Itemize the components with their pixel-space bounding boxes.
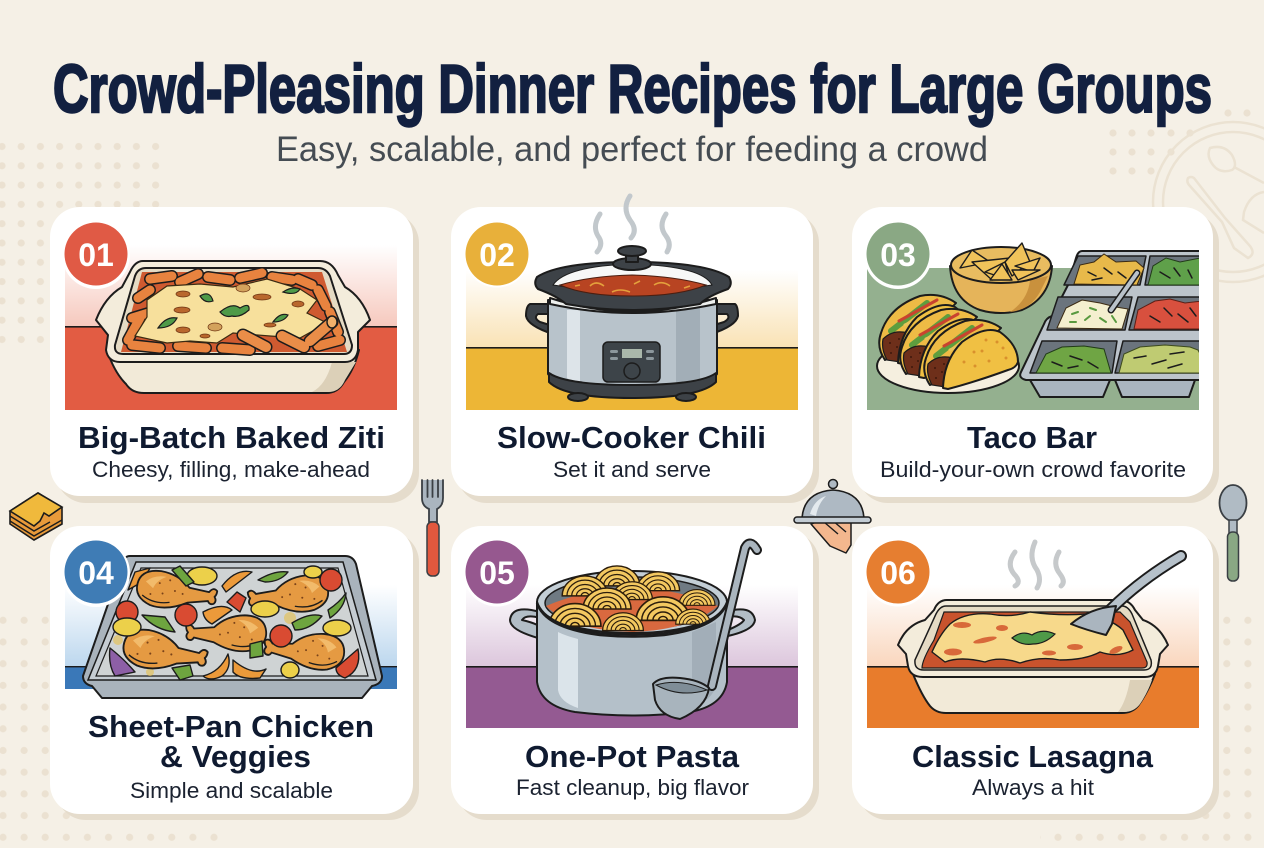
badge 04: 04 [78,555,114,591]
badge 02: 02 [479,237,515,273]
illustration: baked ziti dish [96,261,370,393]
badge 02 [464,220,530,288]
subtitle: Easy, scalable, and perfect for feeding a crowd [276,130,988,169]
badge 05 [464,540,530,606]
illustration: slow cooker [526,196,738,401]
icon: serving spoon [1071,556,1181,635]
card description: Build-your-own crowd favorite [880,457,1186,482]
card description: Cheesy, filling, make-ahead [92,457,370,482]
icon: serving cloche with hand [794,480,871,553]
decorative plate outline with cutlery [1153,122,1264,282]
icon: chip bowl [950,243,1052,313]
foreground ziti tubes [243,316,337,347]
badge 03: 03 [880,237,916,273]
illustration: sheet pan [83,556,382,698]
badge 04 [62,539,130,607]
icon: lasagna stack [10,493,62,540]
badge 01: 01 [78,237,114,273]
card heading second line: & Veggies [160,739,311,774]
panel: 06 classic lasagna [852,526,1219,820]
illustration: taco bar [877,243,1210,397]
card description: Simple and scalable [130,778,333,803]
panel: 01 baked ziti [50,207,419,503]
icon: topping tray [1020,251,1210,397]
badge 06: 06 [880,555,916,591]
card heading: One-Pot Pasta [525,739,740,774]
card description: Fast cleanup, big flavor [516,775,750,800]
card description: Always a hit [972,775,1095,800]
icon: steam [595,196,669,252]
panel: 05 one-pot pasta [451,526,819,820]
icon: steam [1010,542,1063,588]
badge 03 [864,221,932,289]
icon: spoon [1220,485,1246,581]
card heading: Big-Batch Baked Ziti [78,420,385,455]
icon: tacos on plate [877,295,1019,393]
badge 05: 05 [479,555,515,591]
badge 06 [864,540,932,606]
card heading: Slow-Cooker Chili [497,420,766,455]
card heading: Taco Bar [967,420,1097,455]
badge 01 [62,221,130,289]
card heading: Sheet-Pan Chicken [88,709,374,744]
icon: fork [422,480,443,576]
icon: ladle [653,543,757,719]
card description: Set it and serve [553,457,711,482]
panel: 03 taco bar [852,207,1219,503]
panel: 04 sheet-pan chicken [50,526,419,820]
illustration: lasagna dish [898,542,1181,713]
illustration: pot of pasta [510,543,757,719]
card heading: Classic Lasagna [912,739,1154,774]
panel: 02 slow-cooker chili [451,196,819,503]
